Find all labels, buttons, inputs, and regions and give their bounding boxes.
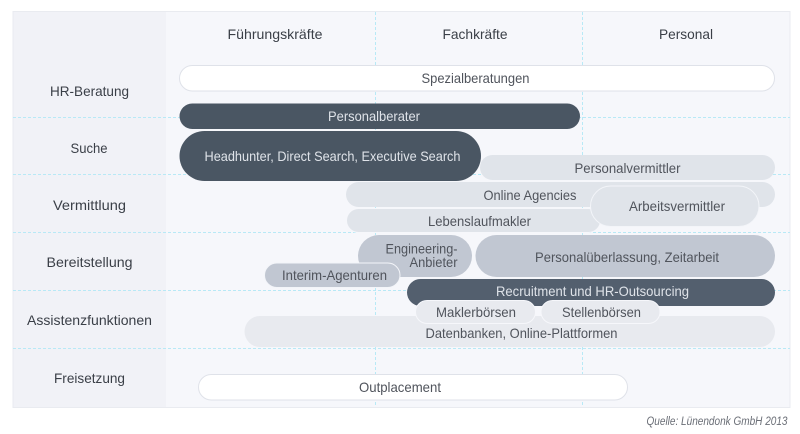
row headings: Suche: [70, 140, 108, 156]
column headings: Personal: [659, 26, 713, 42]
row headings: Assistenzfunktionen: [27, 312, 152, 328]
pill: Headhunter, Direct Search, Executive Search: Headhunter, Direct Search, Executive Search: [204, 148, 460, 164]
pill: Arbeitsvermittler: Arbeitsvermittler: [629, 198, 725, 214]
pill: Maklerbörsen: Maklerbörsen: [436, 304, 516, 320]
pill: Spezialberatungen: [180, 66, 774, 91]
pill: Personalüberlassung, Zeitarbeit: [476, 235, 775, 277]
row headings: Freisetzung: [54, 370, 125, 386]
pill: Interim-Agenturen: [264, 263, 400, 288]
pill: Datenbanken, Online-Plattformen: Datenbanken, Online-Plattformen: [426, 325, 618, 341]
pill: Stellenbörsen: [541, 300, 660, 324]
pill: Recruitment und HR-Outsourcing: Recruitment und HR-Outsourcing: [496, 283, 689, 299]
pill: Personalberater: Personalberater: [328, 108, 420, 124]
pill: Spezialberatungen: Spezialberatungen: [422, 70, 530, 86]
row headings: HR-Beratung: [50, 83, 129, 99]
pill: Lebenslaufmakler: Lebenslaufmakler: [428, 213, 531, 229]
column headings: Fachkräfte: [442, 26, 508, 42]
pill: Datenbanken, Online-Plattformen: [244, 316, 775, 347]
row headings: Vermittlung: [53, 197, 126, 213]
column headings: Führungskräfte: [228, 26, 323, 42]
pill: Headhunter, Direct Search, Executive Search: [180, 131, 481, 181]
pill: Recruitment und HR-Outsourcing: [407, 279, 775, 306]
pill: Online Agencies: [346, 182, 775, 207]
pill: Arbeitsvermittler: [590, 186, 759, 226]
pill: Engineering-Anbieter: [358, 235, 472, 277]
pill: Interim-Agenturen: Interim-Agenturen: [282, 267, 387, 283]
pill: Personalüberlassung, Zeitarbeit: Personalüberlassung, Zeitarbeit: [535, 249, 719, 265]
pill: Engineering-Anbieter: Engineering-: [386, 240, 458, 256]
pill: Personalberater: [180, 104, 580, 129]
pill: Maklerbörsen: [416, 300, 536, 324]
pill: Engineering-Anbieter: Anbieter: [410, 254, 458, 270]
pill: Stellenbörsen: Stellenbörsen: [562, 304, 641, 320]
pill: Personalvermittler: Personalvermittler: [574, 160, 681, 176]
row headings: Bereitstellung: [46, 254, 132, 270]
pill: Outplacement: Outplacement: [359, 379, 441, 395]
row headings: [27, 83, 152, 386]
pill: Online Agencies: Online Agencies: [484, 187, 576, 203]
column headings: [228, 26, 713, 42]
pill: Personalvermittler: [480, 155, 775, 180]
pill: Lebenslaufmakler: [346, 208, 600, 232]
pill: Outplacement: [198, 374, 628, 400]
